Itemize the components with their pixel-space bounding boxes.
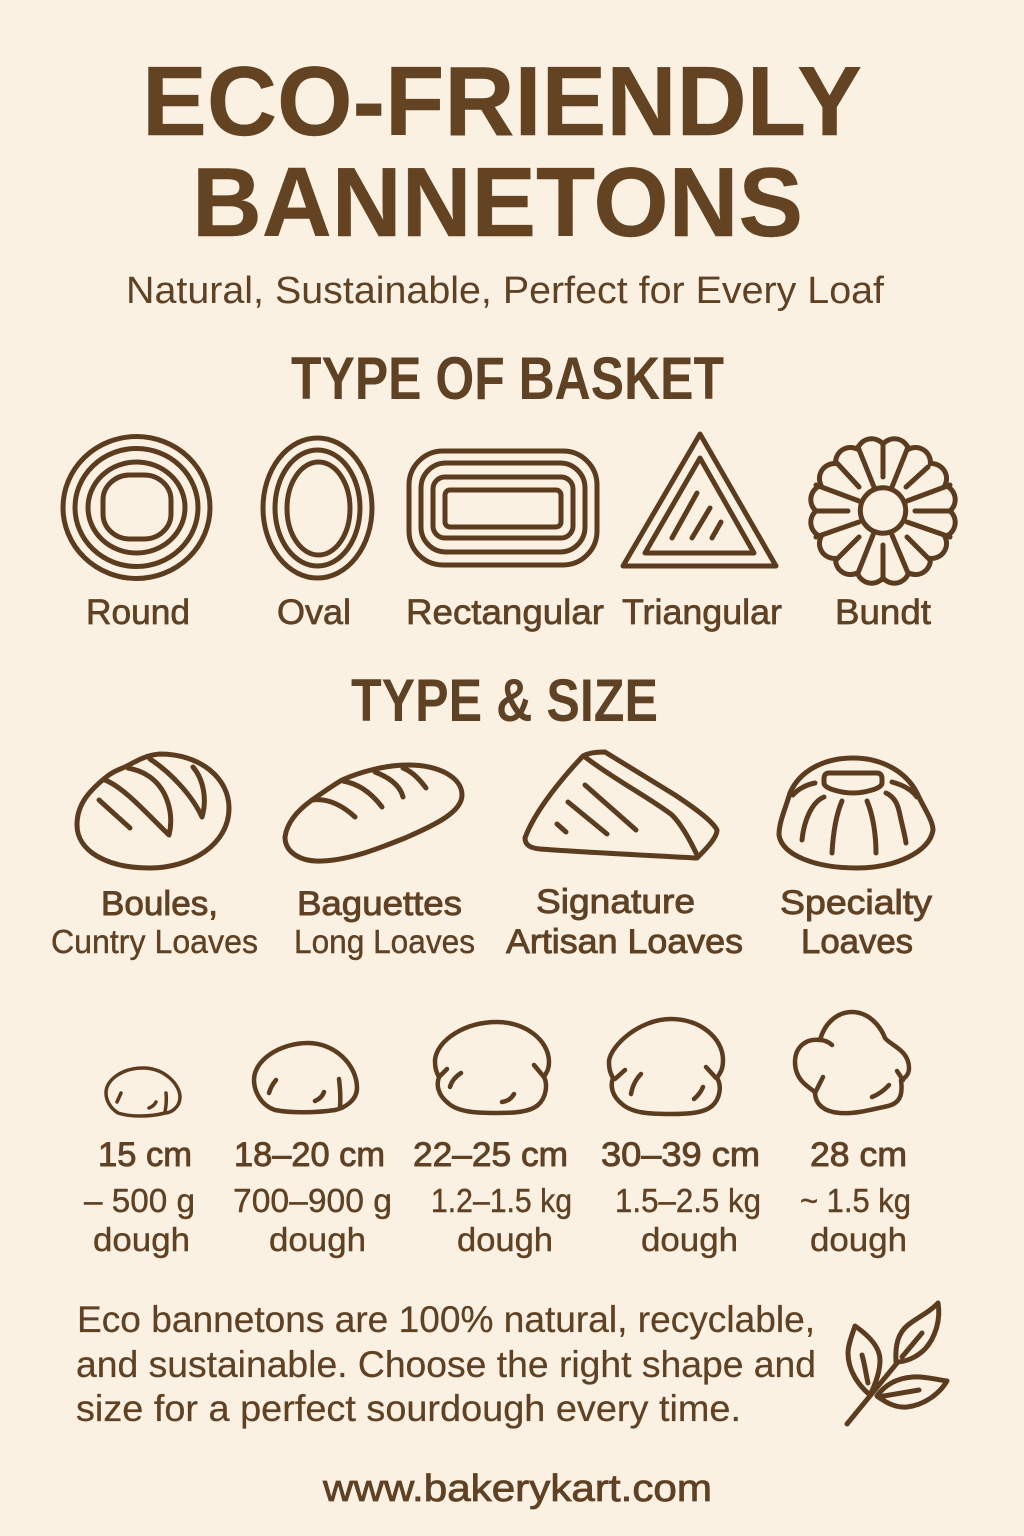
label: baguettes: Baguettes [297,885,462,923]
icon: triangular basket [623,434,776,566]
text: 18-20 cm: dough [269,1221,366,1258]
label: bundt: Bundt [835,593,931,632]
text: 30-39 cm: 1.5–2.5 kg [615,1182,761,1219]
text: 18-20 cm: 18–20 cm [234,1136,385,1174]
icon: baguette loaf [285,765,462,861]
icon: bundt basket [811,439,955,583]
text block: closing message [76,1299,816,1429]
label: boules: Boules, [101,885,218,923]
icon: oval basket [263,438,372,578]
panel: loaf types [51,752,933,961]
label: specialty [780,884,932,961]
text: 15 cm [84,1136,195,1258]
icon: dough 28 cm [795,1012,909,1113]
text: 15 cm: 15 cm [98,1136,192,1174]
label: rectangular: Rectangular [406,593,604,632]
text: 28 cm: 28 cm [810,1136,907,1174]
title [142,46,862,257]
text: 28 cm: ~ 1.5 kg [800,1182,911,1219]
icon: dough 15 cm [106,1068,180,1116]
text block: closing message: size for a perfect sourdough every time. [76,1388,741,1429]
text: 18-20 cm: 700–900 g [233,1182,392,1219]
icon: round basket [63,436,210,578]
title: BANNETONS [192,147,803,257]
icon: leaf sprig [847,1303,947,1424]
heading: type and size: TYPE & SIZE [351,667,658,734]
text: 15 cm: – 500 g [84,1182,195,1219]
text: 18-20 cm [233,1136,392,1258]
title: ECO-FRIENDLY [142,46,862,156]
text: 30-39 cm [601,1136,761,1258]
icon: signature loaf [525,752,717,858]
text block: closing message: and sustainable. Choose the right shape and [76,1344,816,1385]
text: 28 cm: dough [810,1221,907,1258]
text: 22-25 cm: dough [457,1221,553,1258]
icon: rectangular basket [409,451,597,565]
text: 30-39 cm: dough [641,1221,738,1258]
text: 22-25 cm [413,1136,572,1258]
icon: dough 18-20 cm [254,1043,357,1112]
subtitle: Natural, Sustainable, Perfect for Every Loaf [126,270,884,312]
label: boules [51,885,258,960]
text: 30-39 cm: 30–39 cm [601,1136,760,1174]
panel: basket shapes [63,434,955,632]
label: baguettes: Long Loaves [294,923,475,960]
icon: dough 30-39 cm [609,1019,723,1114]
label: oval: Oval [277,593,351,632]
label: signature: Artisan Loaves [506,923,743,961]
text block: closing message: Eco bannetons are 100% natural, recyclable, [77,1299,815,1340]
heading: type of basket: TYPE OF BASKET [291,345,724,412]
website url: www.bakerykart.com [322,1468,712,1510]
text: 22-25 cm: 22–25 cm [413,1136,568,1174]
label: round: Round [86,593,190,632]
label: triangular: Triangular [622,593,782,632]
label: specialty: Loaves [801,923,913,961]
icon: specialty loaf [779,758,933,868]
panel: dough sizes [84,1012,911,1258]
label: baguettes [294,885,475,960]
text: 15 cm: dough [93,1221,190,1258]
text: 22-25 cm: 1.2–1.5 kg [431,1182,572,1219]
label: boules: Cuntry Loaves [51,923,258,960]
label: signature [506,883,743,961]
label: signature: Signature [536,883,695,921]
icon: dough 22-25 cm [435,1022,549,1113]
icon: boule loaf [77,754,229,868]
text: 28 cm [800,1136,911,1258]
label: specialty: Specialty [780,884,932,922]
